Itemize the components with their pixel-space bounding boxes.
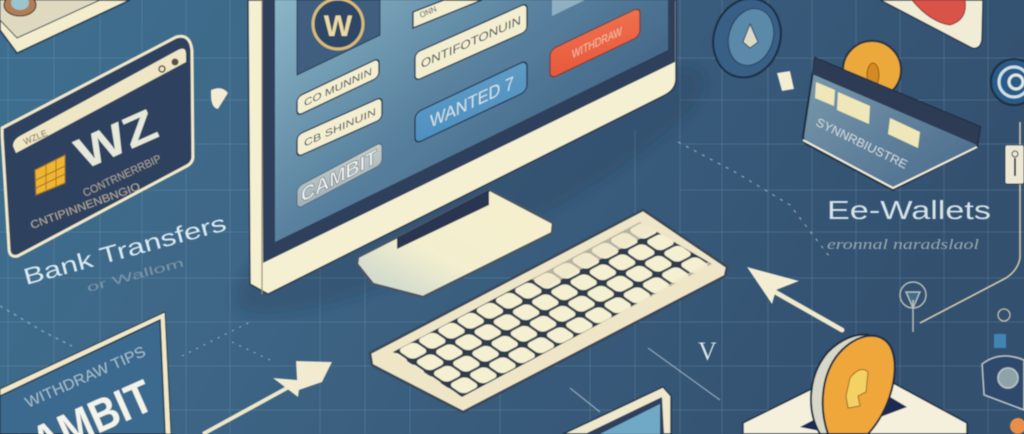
button: grey: CAMBIT bbox=[301, 145, 377, 208]
panel: bank card bbox=[2, 36, 193, 256]
caption under E-Wallets: eronnal naradslaol bbox=[827, 237, 979, 253]
monitor shadow bbox=[212, 27, 728, 353]
card label and dots bbox=[22, 58, 179, 147]
icon: gold coin in wallet bbox=[843, 41, 901, 99]
icon: gold chip bbox=[35, 155, 65, 195]
V mark: V bbox=[698, 337, 717, 366]
arrow: lower left bbox=[203, 361, 332, 434]
monitor stand base bbox=[357, 190, 553, 297]
button: blue bbox=[415, 60, 527, 144]
button: red: WITHDRAW bbox=[572, 24, 622, 61]
button: method one bbox=[297, 58, 379, 116]
laptop bottom center bbox=[563, 387, 671, 434]
icon: target badge bbox=[991, 59, 1024, 105]
heading: E-Wallets: Ee-Wallets bbox=[827, 195, 991, 225]
caption below Bank Transfers: or Wallom bbox=[85, 255, 185, 295]
button: blue: WANTED 7 bbox=[430, 73, 514, 133]
small spiral symbol bbox=[998, 309, 1010, 321]
icon: coin box bbox=[743, 335, 967, 434]
keyboard bbox=[370, 210, 727, 412]
logo panel bbox=[297, 0, 380, 75]
decorative dotted paths bbox=[0, 142, 832, 412]
monitor screen bbox=[275, 0, 668, 242]
keys bbox=[393, 222, 712, 397]
icon: wallet card bbox=[803, 58, 980, 190]
card label and dots: WZLE bbox=[22, 128, 49, 147]
button: method three bbox=[413, 0, 482, 28]
icon: blue chip coin bbox=[703, 0, 791, 86]
button: red bbox=[550, 7, 640, 79]
button: method four bbox=[415, 3, 527, 81]
arrow: pointing at keyboard bbox=[747, 267, 842, 330]
button: method four: ONTIFOTONUIN bbox=[421, 13, 521, 71]
label: small cream marker bbox=[211, 88, 228, 109]
button: method one: CO MUNNIN bbox=[304, 66, 372, 110]
icon: small lock device bbox=[982, 334, 1024, 434]
heading: Bank Transfers: Bank Transfers bbox=[20, 210, 229, 290]
panel: lower-left card bbox=[0, 312, 171, 434]
card number: CONTRNERRBIP bbox=[81, 153, 163, 200]
gold coin bbox=[811, 335, 895, 434]
card: top right bbox=[880, 0, 983, 48]
icon: pin symbol bbox=[900, 282, 926, 332]
button: method three: ONN bbox=[418, 4, 438, 20]
pale tab bbox=[552, 0, 585, 16]
device: top-left payment terminal bbox=[0, 0, 130, 53]
logo panel: W bbox=[324, 10, 353, 43]
icon: wallet card: SYNNRBIUSTRE bbox=[814, 115, 910, 172]
button: method two: CB SHINUIN bbox=[304, 107, 376, 150]
card header strip bbox=[13, 49, 186, 153]
card caption: WITHDRAW TIPS bbox=[23, 343, 148, 412]
monitor bbox=[248, 0, 676, 294]
icon: tag with connector line bbox=[920, 122, 1024, 323]
monitor stand neck bbox=[397, 190, 489, 249]
button: method two bbox=[297, 97, 382, 157]
card holder: CNTIPINNENBNGIO bbox=[29, 181, 142, 232]
card logo WZ: WZ bbox=[68, 100, 165, 179]
small cream marker bbox=[777, 71, 794, 91]
